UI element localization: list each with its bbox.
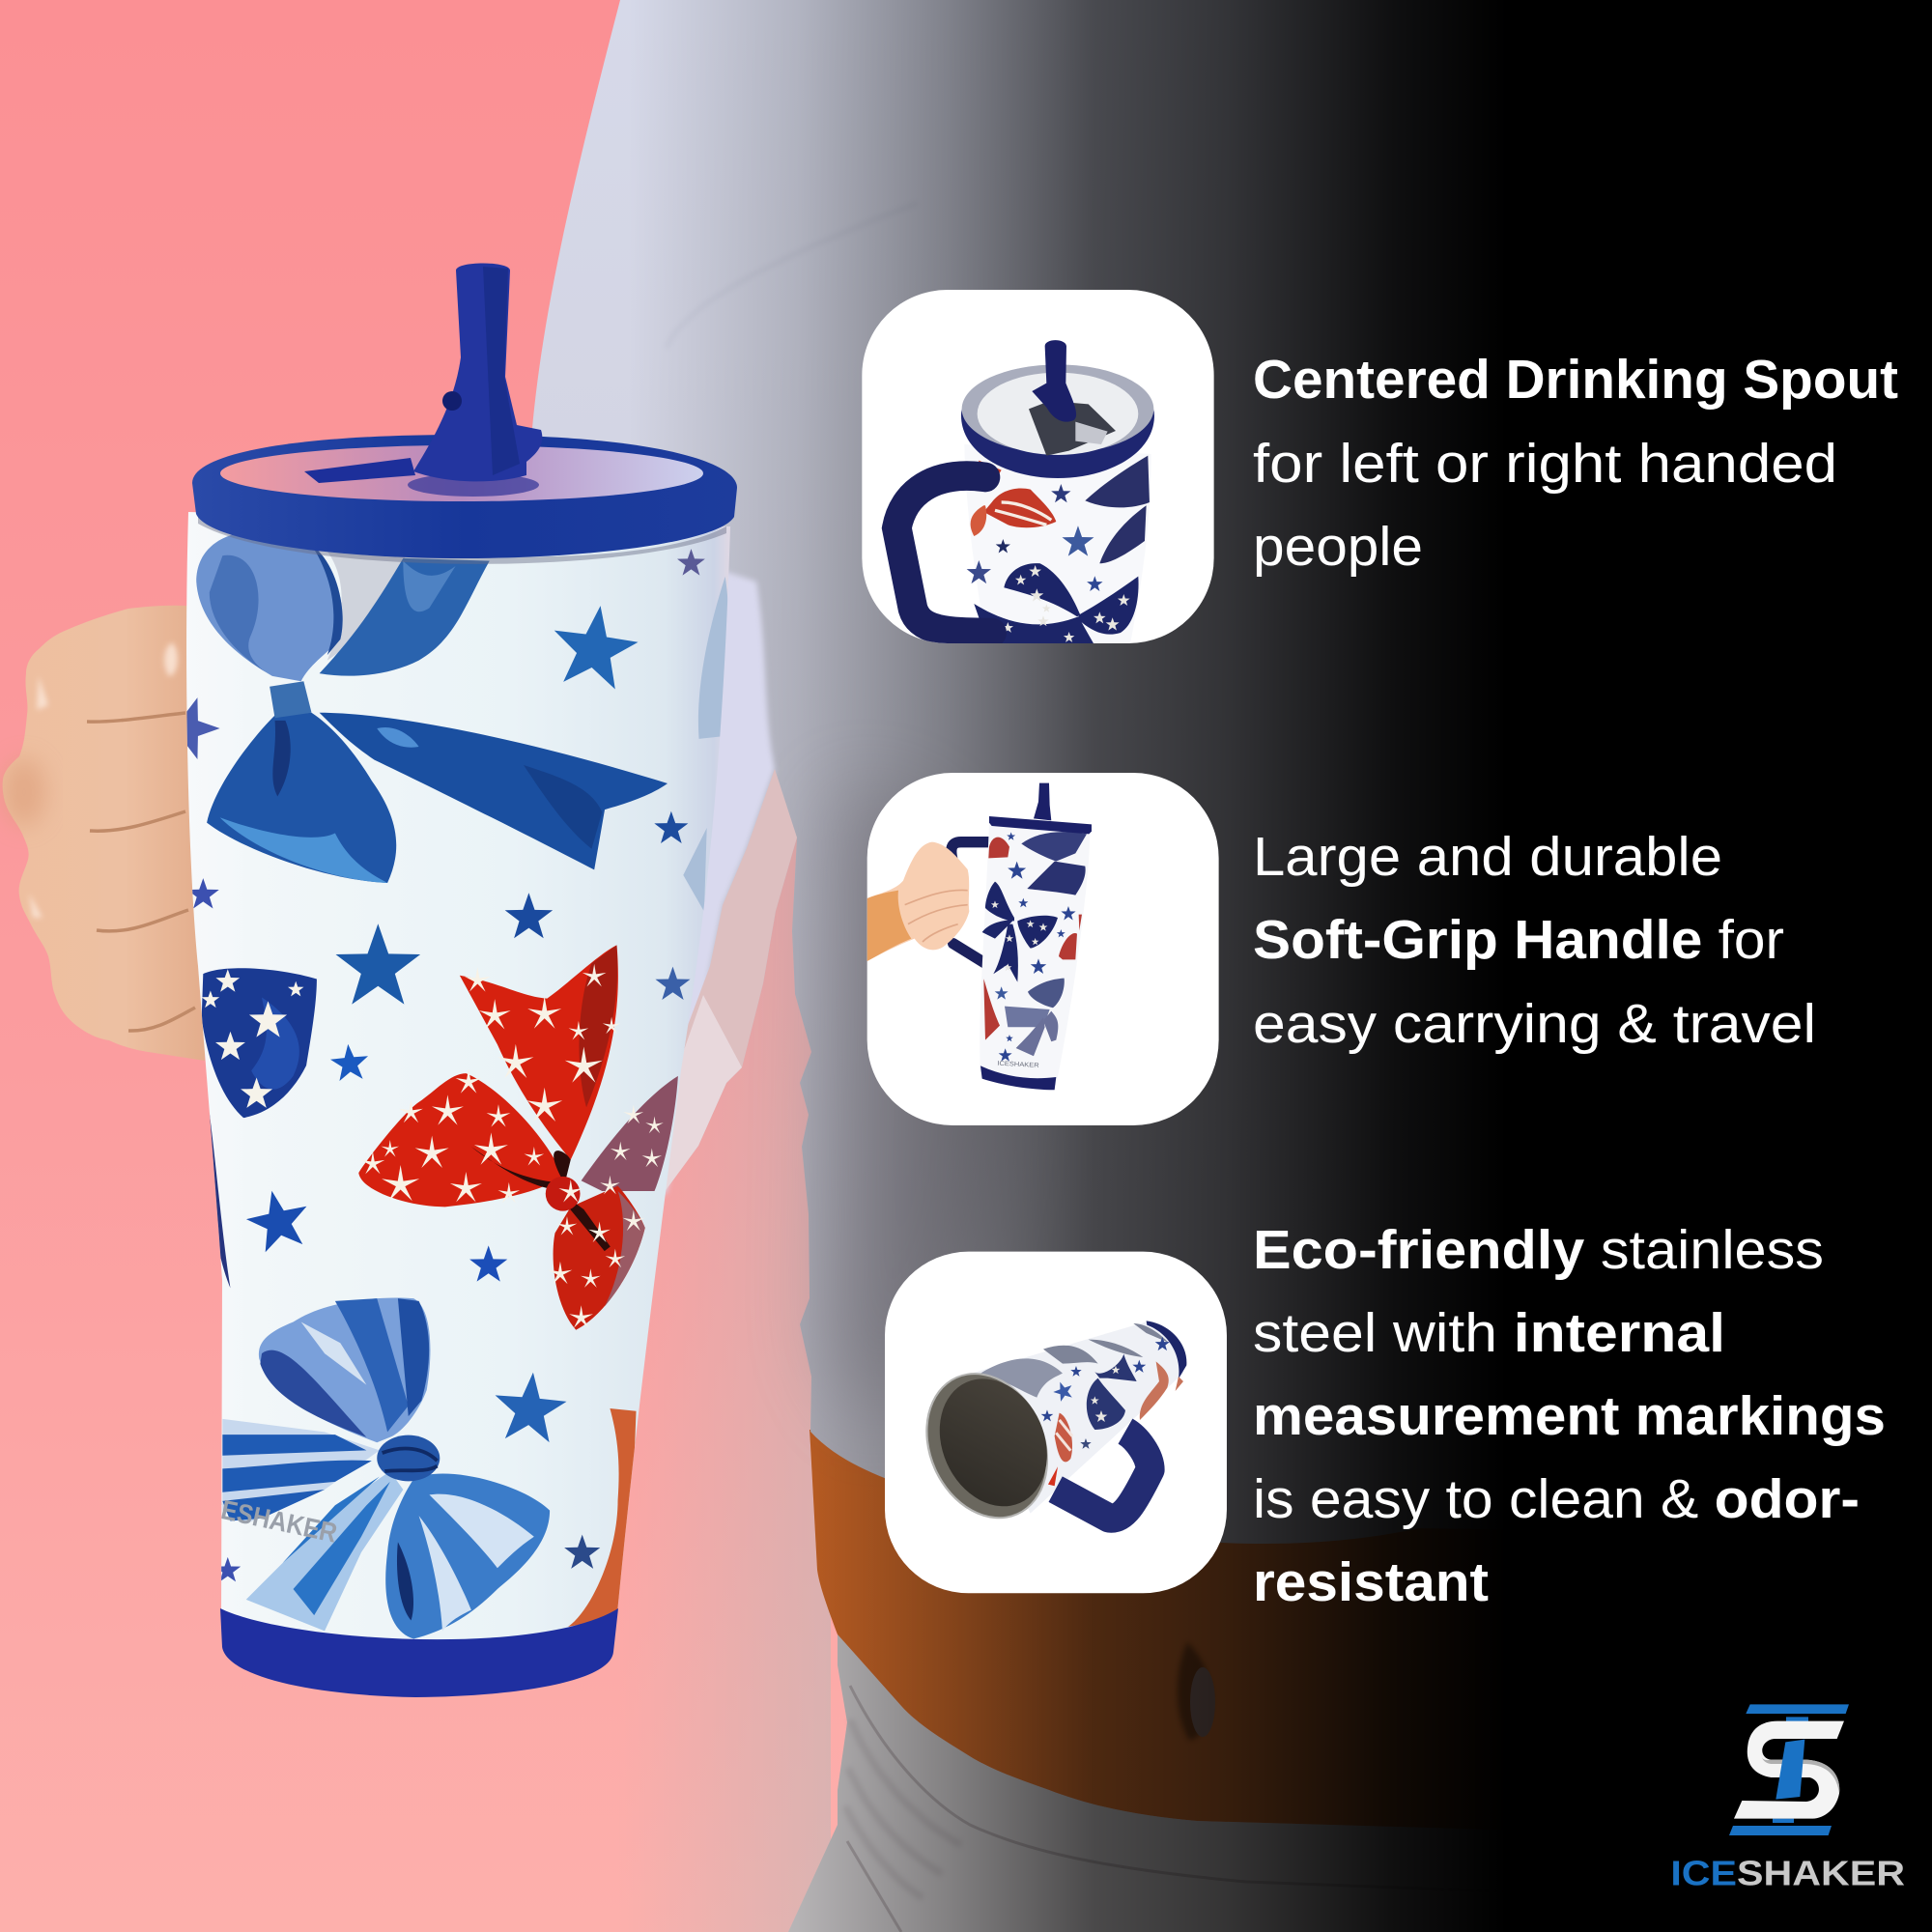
striped bow upper lobe	[259, 1298, 430, 1442]
arm sleeve behind the tumbler	[599, 541, 797, 1193]
flag bow, red bow, striped bow	[195, 945, 678, 1638]
feature text 3: measurement markings	[1253, 1385, 1886, 1447]
tumbler body	[980, 823, 1090, 1085]
bare midriff	[810, 1430, 1932, 1845]
slider opening	[1029, 401, 1116, 456]
printed bows and stars, clipped to the body	[161, 532, 728, 1638]
shirt	[522, 0, 1932, 1544]
feature card 2: soft-grip handle	[867, 773, 1219, 1125]
upper blue bow	[196, 532, 728, 912]
navy bow right	[1085, 456, 1150, 507]
small blue stars	[1051, 484, 1070, 502]
feature text 1: for left or right handed	[1253, 433, 1837, 495]
feature text 2	[1253, 826, 1816, 1055]
slider on lid	[304, 458, 415, 483]
red bow left lobe	[358, 1073, 563, 1207]
red striped bow	[978, 461, 1002, 486]
lower bow	[1028, 979, 1065, 1008]
knuckle redness	[3, 758, 45, 826]
silicone base	[220, 1608, 618, 1697]
tumbler body	[966, 1321, 1183, 1514]
sleeve beige fold	[664, 769, 797, 1193]
white stars on red bow	[361, 964, 664, 1328]
feature text 3: steel with internal	[1253, 1302, 1725, 1364]
stars upper	[161, 549, 705, 1005]
feature text 3: Eco-friendly stainless	[1253, 1219, 1824, 1281]
waistband ribbing	[845, 1719, 961, 1898]
belly button	[1178, 1642, 1215, 1741]
dark fragment at left edge	[210, 1113, 230, 1288]
red bow lower lobe	[554, 1186, 645, 1330]
stars	[1008, 862, 1026, 879]
card background	[885, 1252, 1227, 1593]
sleeve lavender part	[599, 541, 775, 1193]
lid inner surface	[978, 373, 1138, 455]
holding hand	[3, 606, 205, 1061]
translucent lid rim	[962, 364, 1153, 453]
straw	[1034, 783, 1051, 820]
feature text 3: is easy to clean & odor-	[1253, 1468, 1860, 1530]
lower stars	[329, 1042, 370, 1082]
navy flag bow fragment	[202, 968, 317, 1118]
faded navy bow shapes	[980, 1358, 1063, 1398]
finger creases	[87, 713, 195, 1031]
feature text 2: easy carrying & travel	[1253, 993, 1816, 1055]
straw reflection on lid	[408, 473, 539, 497]
reflected bow on right side	[683, 577, 728, 912]
flag bow	[1094, 1354, 1137, 1381]
logo mark	[1729, 1704, 1849, 1835]
stars	[1051, 1378, 1075, 1403]
dark gradient overlay fading to black on the right	[628, 0, 1932, 1932]
handle	[1056, 1432, 1151, 1519]
torso fold shadow	[821, 789, 1005, 1430]
mini brand: ICESHAKER	[997, 1061, 1039, 1069]
lid rim	[192, 435, 737, 558]
model torso: skin, waistband and shirt	[522, 0, 1932, 1932]
card background	[867, 773, 1219, 1125]
top navy bow	[1021, 832, 1087, 862]
card background	[862, 290, 1214, 643]
lid	[989, 816, 1092, 834]
striped bow lower ribbon	[246, 1471, 403, 1631]
orange bow	[1140, 1361, 1183, 1420]
etched brand on tumbler: ICESHAKER	[195, 1489, 340, 1548]
flag bow	[985, 882, 1014, 921]
waistband	[788, 1634, 1932, 1932]
feature card 3: eco-friendly stainless steel interior	[885, 1252, 1227, 1593]
base	[980, 1065, 1056, 1090]
handle	[896, 476, 992, 633]
sleeve cuff folds	[664, 995, 742, 1193]
feature text 1: people	[1253, 516, 1423, 578]
main tumbler	[161, 263, 737, 1697]
shadow under lid	[198, 512, 726, 564]
red bow translucent right lobe	[582, 1076, 678, 1191]
navy rim	[961, 374, 1154, 478]
feature text 1: Centered Drinking Spout	[1253, 349, 1898, 411]
wordmark: ICESHAKER	[1670, 1853, 1905, 1892]
grey fade on the background near the torso	[618, 773, 831, 1932]
navy flag bow	[1004, 563, 1080, 616]
tumbler body	[964, 444, 1151, 647]
spout	[1032, 340, 1076, 422]
subtle armpit crease	[667, 203, 918, 348]
striped bow	[1055, 1413, 1072, 1462]
Iceshaker logo	[1670, 1704, 1905, 1892]
opening steel rim	[903, 1353, 1070, 1539]
arm and hand	[867, 842, 969, 961]
feature text 3: resistant	[1253, 1551, 1489, 1613]
knuckle highlights	[29, 642, 178, 918]
tumbler body	[186, 512, 730, 1651]
red bow upper lobe	[460, 945, 618, 1160]
far end base	[1147, 1321, 1186, 1378]
striped bow left ribbons	[222, 1419, 380, 1523]
orange bow at right edge	[568, 1408, 637, 1627]
feature text 2: Soft-Grip Handle for	[1253, 909, 1784, 971]
feature text 3	[1253, 1219, 1886, 1613]
lid top surface	[220, 445, 703, 501]
red fragments	[983, 838, 1082, 1040]
drinking spout	[413, 263, 542, 481]
feature card 1: centered drinking spout	[862, 290, 1214, 647]
waistband seam	[847, 1686, 1932, 1932]
handle	[952, 842, 992, 963]
feature text 2: Large and durable	[1253, 826, 1722, 888]
striped bow right lobe	[385, 1474, 550, 1638]
feature text 1	[1253, 349, 1898, 578]
